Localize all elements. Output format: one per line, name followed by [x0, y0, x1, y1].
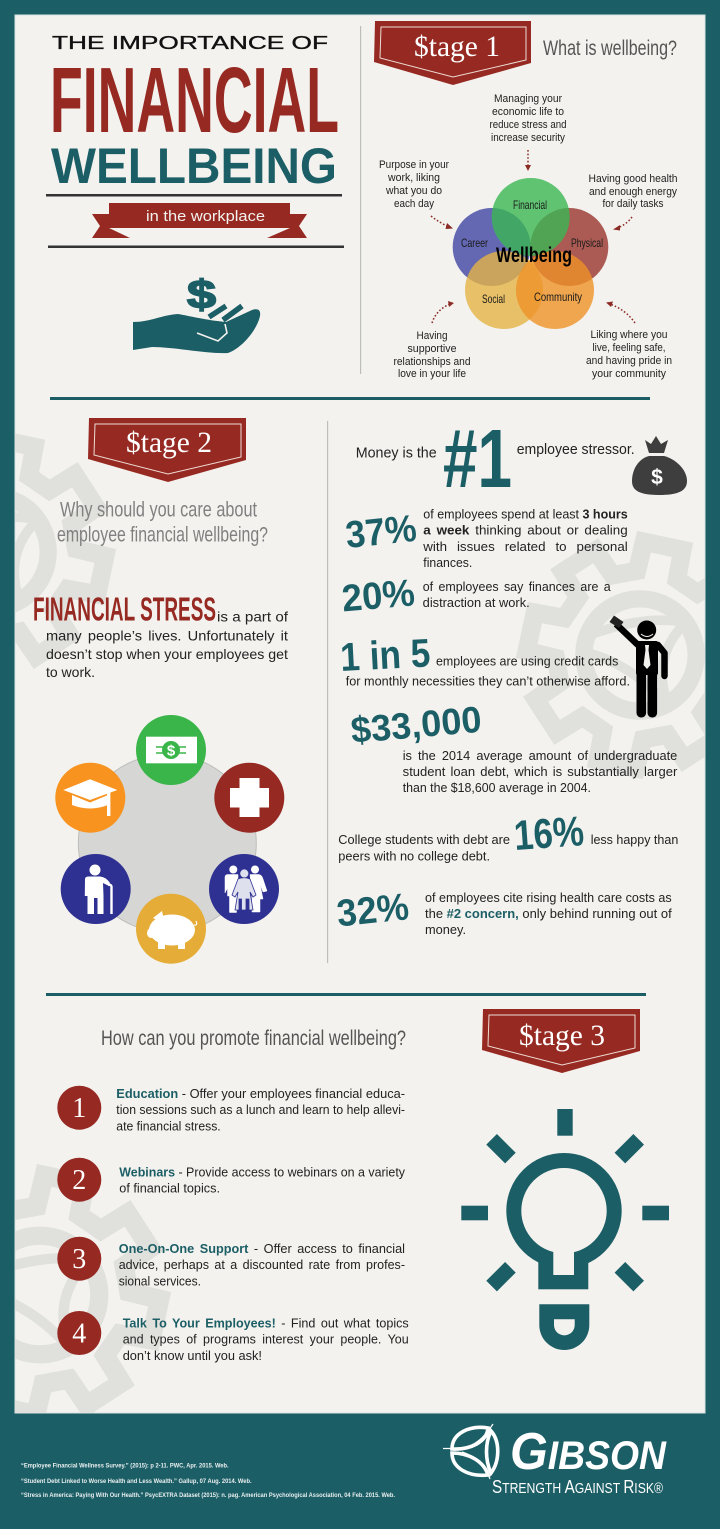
label: career: work, liking — [387, 172, 440, 184]
label: community: live, feeling safe, — [592, 342, 666, 354]
stat: 16% — [338, 807, 678, 864]
venn labels: Physical — [571, 236, 603, 250]
label: physical — [588, 173, 678, 210]
label: career: Purpose in your — [379, 159, 449, 171]
stat: $33,000 — [349, 699, 678, 795]
circle: financial — [492, 178, 570, 256]
step 1: education: Education - Offer your employees financial educa- — [116, 1086, 405, 1101]
footer: references: “Stress in America: Paying With Our Health.” PsycEXTRA Dataset (2015): n. pag. American Psychological Association, 04 Feb. 2015. Web. — [21, 1492, 395, 1499]
stat: 37%: 37% — [344, 508, 419, 557]
venn labels: Financial — [513, 198, 547, 212]
icon ring: causes of financial stress — [55, 715, 284, 964]
title rule bottom — [48, 246, 344, 248]
label: community: and having pride in — [586, 355, 672, 367]
step 4: talk to your employees: Talk To Your Employees! - Find out what topics — [123, 1316, 409, 1331]
text block: financial stress: many people’s lives. Unfortunately it — [46, 628, 288, 644]
background gears — [0, 420, 720, 1435]
stat: 37%: a week thinking about or dealing — [423, 523, 628, 538]
step 1: education: 1 — [72, 1093, 86, 1124]
label: physical: and enough energy — [589, 186, 678, 198]
arrows: dotted pointers to venn — [431, 150, 635, 323]
step 3: one-on-one support: sional services. — [119, 1274, 201, 1289]
text block: financial stress: doesn’t stop when your employees get — [46, 647, 288, 662]
icon: graduation cap — [55, 763, 125, 833]
label: career — [379, 159, 449, 210]
title rule top — [46, 194, 342, 196]
stat: 32%: of employees cite rising health care costs as — [425, 890, 672, 905]
stat: money is #1: #1 — [443, 412, 512, 505]
label: community — [586, 329, 672, 380]
step 1: education: tion sessions such as a lunch and learn to help allevi- — [116, 1102, 405, 1117]
venn center label: Wellbeing — [496, 244, 572, 267]
label: social — [394, 330, 470, 380]
label: financial: reduce stress and — [490, 119, 566, 131]
text block: financial stress — [33, 590, 288, 680]
stat: 16%: College students with debt are — [338, 832, 510, 847]
label: physical: for daily tasks — [602, 198, 664, 210]
banner: stage 1 — [374, 21, 531, 85]
step 3: one-on-one support — [57, 1237, 405, 1289]
label: financial: economic life to — [492, 106, 564, 118]
heading: why should you care — [57, 498, 268, 546]
step 2: webinars — [57, 1158, 406, 1202]
banner: stage 2: $tage 2 — [126, 426, 212, 459]
icon: money: $ — [167, 742, 176, 760]
venn labels — [461, 198, 603, 306]
step 2: webinars: 2 — [72, 1165, 86, 1196]
label: social: love in your life — [398, 368, 466, 380]
heading: why should you care: Why should you care about — [60, 498, 257, 522]
stat: $33,000: $33,000 — [349, 699, 483, 751]
title: wellbeing: WELLBEING — [51, 138, 337, 194]
ring background — [78, 754, 256, 932]
step 2: webinars: Webinars - Provide access to webinars on a variety — [119, 1165, 406, 1180]
stat: $33,000: than the $18,600 average in 2004. — [403, 780, 591, 795]
stat: 20%: 20% — [340, 572, 417, 620]
venn labels: Career — [461, 236, 488, 250]
label: career: each day — [394, 198, 435, 210]
step 4: talk to your employees — [57, 1311, 409, 1363]
logo emblem — [443, 1424, 498, 1479]
stat: money is #1: employee stressor. — [517, 441, 635, 458]
label: financial: Managing your — [494, 93, 562, 105]
venn labels: Social — [482, 292, 505, 306]
stat: 20% — [340, 572, 612, 620]
stat: money is #1 — [356, 412, 635, 505]
step 4: talk to your employees: and types of programs interest your people. You — [123, 1332, 409, 1347]
stat: 1 in 5 — [339, 631, 630, 689]
icon: man holding credit card — [610, 616, 664, 718]
icon: medical cross — [214, 763, 284, 833]
step 1: education — [57, 1086, 405, 1133]
label: social: relationships and — [394, 356, 470, 368]
stat: 37%: with issues related to personal — [422, 539, 628, 554]
footer: references: “Student Debt Linked to Worse Health and Less Wealth.” Gallup, 07 Aug. 2014. Web. — [21, 1478, 252, 1485]
stat: money is #1: Money is the — [356, 444, 437, 461]
label: financial — [490, 93, 566, 144]
logo: gibson — [443, 1423, 667, 1497]
stat: 16%: peers with no college debt. — [338, 849, 490, 864]
heading: how can you promote: How can you promote financial wellbeing? — [101, 1027, 406, 1050]
icon: family — [209, 854, 279, 924]
text block: financial stress: FINANCIAL STRESS — [33, 590, 216, 628]
banner: stage 2 — [88, 418, 246, 482]
text block: financial stress: to work. — [46, 665, 95, 680]
circle: community — [516, 251, 594, 329]
circle: physical — [530, 208, 608, 286]
circle: social — [465, 251, 543, 329]
stat: 37%: finances. — [423, 555, 472, 570]
title: financial: FINANCIAL — [50, 48, 339, 152]
ribbon: in the workplace — [92, 203, 307, 238]
icon: money bag: $ — [651, 466, 663, 489]
label: community: your community — [592, 368, 667, 380]
text block: financial stress: is a part of — [217, 610, 288, 624]
label: career: what you do — [385, 185, 442, 197]
stat: 32% — [335, 886, 672, 937]
icon: light bulb — [461, 1109, 669, 1350]
banner: stage 1: $tage 1 — [414, 30, 500, 63]
stat: 37%: of employees spend at least 3 hours — [423, 507, 628, 522]
label: social: Having — [416, 330, 448, 342]
logo tagline: STRENGTH AGAINST RISK® — [492, 1477, 663, 1497]
icon: money bag — [632, 436, 687, 495]
icon: money — [136, 715, 206, 785]
logo wordmark: GIBSON — [510, 1423, 667, 1481]
stat: 1 in 5: 1 in 5 — [339, 631, 431, 680]
title: the importance of: THE IMPORTANCE OF — [52, 32, 328, 53]
step 4: talk to your employees: 4 — [72, 1318, 86, 1350]
circle: career — [453, 208, 531, 286]
label: community: Liking where you — [590, 329, 668, 341]
stat: 32%: the #2 concern, only behind running out of — [425, 906, 672, 921]
label: financial: increase security — [491, 132, 566, 144]
divider: stage 1 / stage 2 — [50, 397, 650, 400]
stat: 32%: money. — [425, 922, 466, 937]
ribbon: in the workplace: in the workplace — [146, 208, 265, 225]
stat: 1 in 5: employees are using credit cards — [436, 654, 618, 669]
divider: stage 2 column — [327, 421, 328, 963]
banner: stage 3: $tage 3 — [519, 1019, 605, 1052]
divider: top column — [360, 26, 361, 374]
step 2: webinars: of financial topics. — [119, 1181, 220, 1196]
stat: 16%: 16% — [512, 807, 585, 859]
heading: why should you care: employee financial wellbeing? — [57, 524, 268, 546]
title block — [46, 32, 344, 248]
step 3: one-on-one support: 3 — [72, 1244, 86, 1275]
stat: 32%: 32% — [335, 886, 411, 935]
icon: hand holding dollar: $ — [187, 273, 216, 317]
stat: $33,000: student loan debt, which is substantially larger — [403, 764, 678, 779]
divider: stage 2 / stage 3 — [46, 993, 646, 996]
banner: stage 3 — [482, 1009, 640, 1073]
step 1: education: ate financial stress. — [116, 1118, 221, 1133]
icon: hand holding dollar — [133, 273, 260, 353]
label: social: supportive — [408, 343, 456, 355]
footer: references: “Employee Financial Wellness Survey.” (2015): p 2-11. PWC, Apr. 2015. Web. — [21, 1462, 229, 1470]
stat: 16%: less happy than — [591, 832, 678, 847]
step 3: one-on-one support: One-On-One Support - Offer access to financial — [119, 1241, 405, 1256]
icon: elderly person — [61, 854, 131, 924]
step 3: one-on-one support: advice, perhaps at a discounted rate from profes- — [119, 1257, 405, 1272]
heading: what is wellbeing: What is wellbeing? — [543, 37, 677, 60]
stat: $33,000: is the 2014 average amount of undergraduate — [403, 748, 677, 763]
stat: 20%: distraction at work. — [423, 595, 530, 610]
footer: references — [21, 1462, 395, 1499]
icon: piggy bank — [136, 894, 206, 964]
wellbeing venn diagram — [453, 178, 608, 329]
stat: 20%: of employees say finances are a — [423, 579, 612, 594]
stat: 1 in 5: for monthly necessities they can’t otherwise afford. — [346, 674, 630, 689]
stat: 37% — [344, 507, 628, 570]
venn labels: Community — [534, 290, 582, 304]
label: physical: Having good health — [588, 173, 678, 185]
step 4: talk to your employees: don’t know until you ask! — [123, 1348, 262, 1363]
